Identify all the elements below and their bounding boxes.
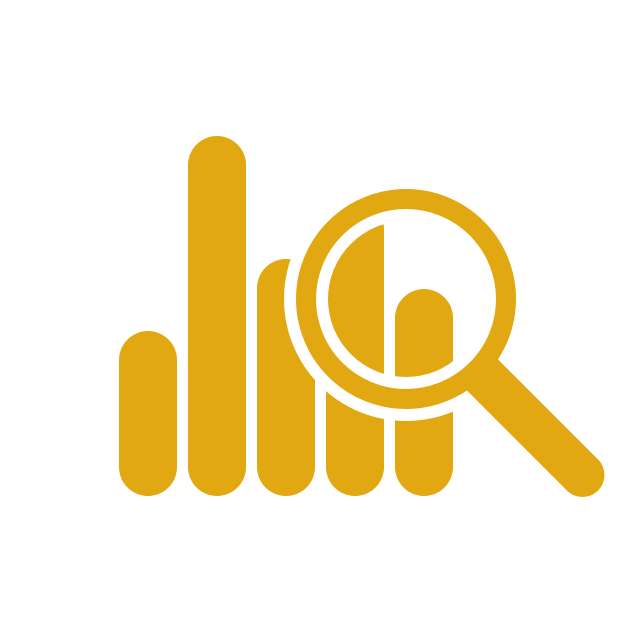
bar chart [119, 136, 453, 496]
icon: bar chart under magnifying glass [119, 136, 604, 497]
icon: magnifying glass [306, 199, 604, 497]
bar 3 [257, 259, 315, 496]
bar 2 [188, 136, 246, 496]
bar 5 [395, 289, 453, 496]
magnifier handle [477, 370, 582, 475]
magnifier handle rounded end [560, 453, 604, 497]
bar 1 [119, 331, 177, 496]
bar 4 [326, 200, 384, 496]
magnifier ring [306, 199, 506, 399]
